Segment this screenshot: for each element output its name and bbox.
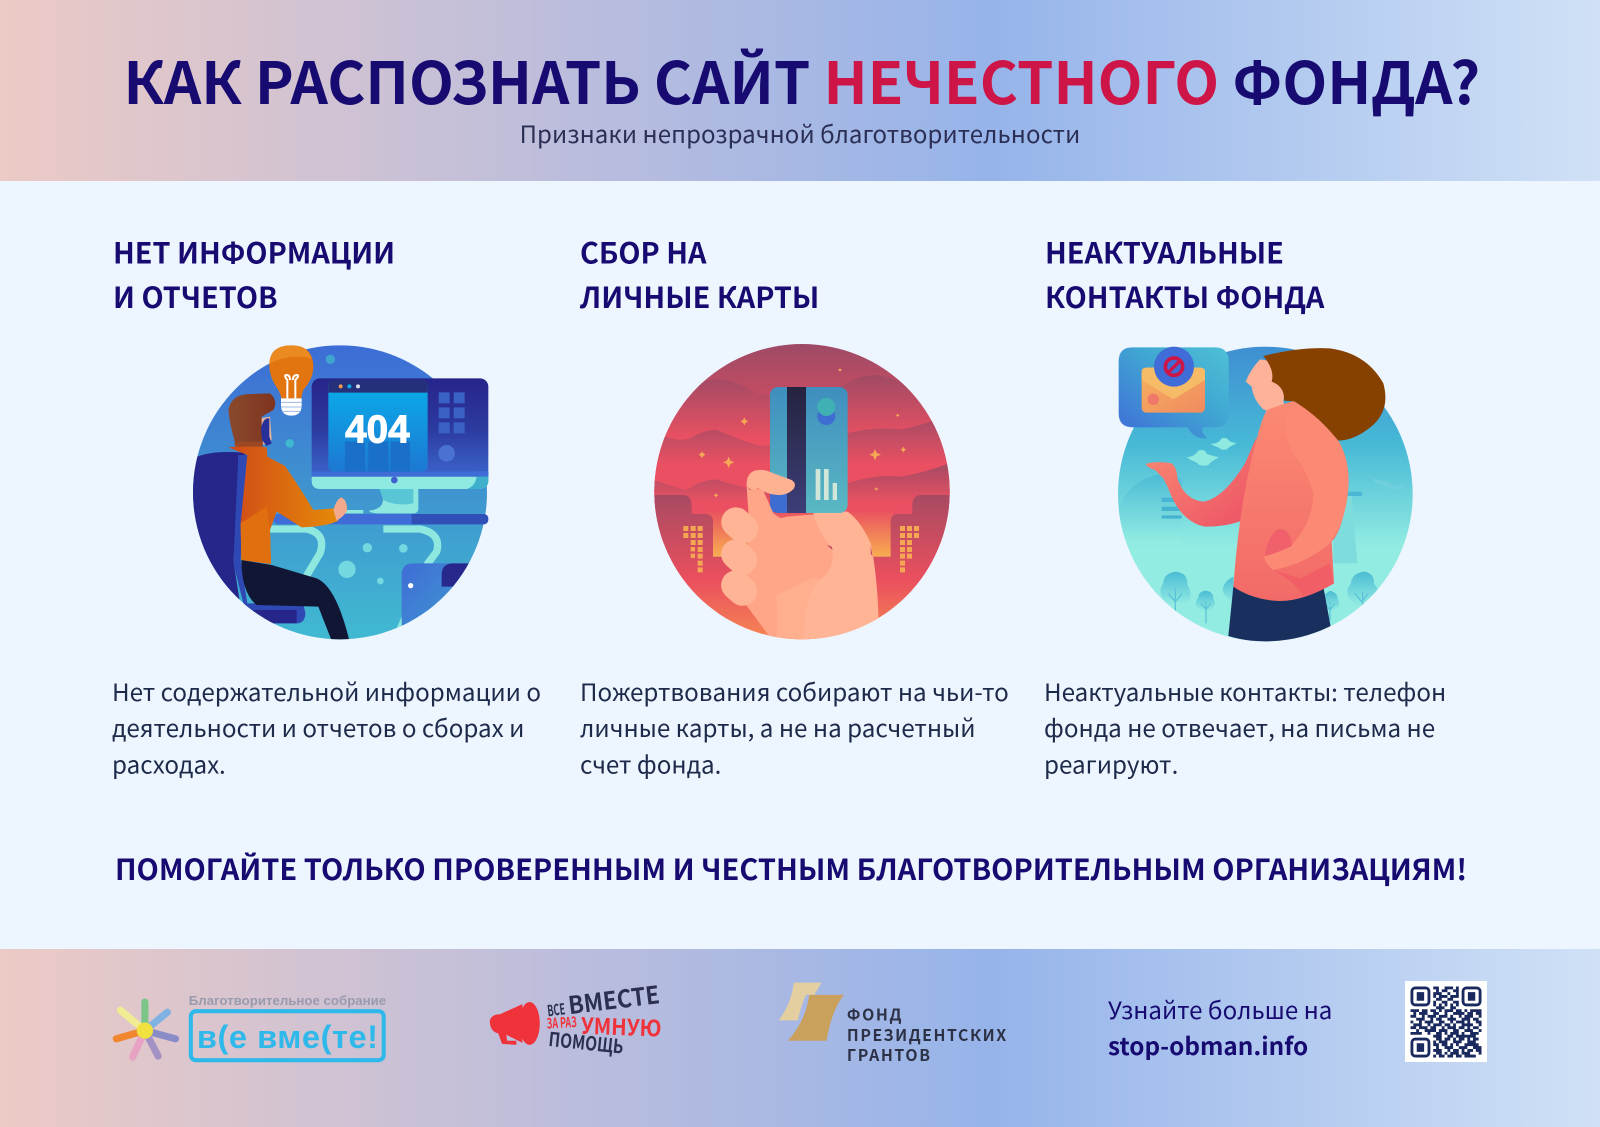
- logo: vse vmeste: [116, 993, 386, 1060]
- logo wordmark: ПОМОЩЬ: [547, 1025, 625, 1060]
- heading: outdated contacts: КОНТАКТЫ ФОНДА: [1045, 276, 1325, 317]
- body text: no information: Нет содержательной информации о: [112, 673, 541, 708]
- panel: personal cards: [579, 232, 1009, 780]
- logo: all together for sensible help: [490, 975, 662, 1060]
- QR code: [1405, 981, 1487, 1062]
- panel: outdated contacts: [1044, 232, 1446, 780]
- subtitle: Признаки непрозрачной благотворительности: [520, 115, 1080, 150]
- body text: outdated contacts: фонда не отвечает, на письма не: [1044, 709, 1435, 744]
- call to action: ПОМОГАЙТЕ ТОЛЬКО ПРОВЕРЕННЫМ И ЧЕСТНЫМ БЛАГОТВОРИТЕЛЬНЫМ ОРГАНИЗАЦИЯМ!: [115, 847, 1467, 889]
- logo wordmark: УМНУЮ: [580, 1009, 662, 1044]
- fund name: [847, 1002, 1008, 1066]
- fund name: ФОНД: [847, 1002, 903, 1025]
- heading: outdated contacts: НЕАКТУАЛЬНЫЕ: [1045, 232, 1284, 272]
- learn more text: [1108, 991, 1332, 1062]
- title: КАК РАСПОЗНАТЬ САЙТ НЕЧЕСТНОГО ФОНДА?: [124, 36, 1480, 121]
- illustration: woman with undelivered letter: [1117, 347, 1417, 643]
- body text: no information: расходах.: [112, 746, 226, 780]
- panel: no information: [112, 232, 541, 780]
- logo wordmark: [546, 975, 662, 1060]
- heading: personal cards: [579, 232, 819, 317]
- body text: personal cards: личные карты, а не на расчетный: [580, 709, 976, 744]
- logo caption: Благотворительное собрание: [189, 993, 386, 1008]
- heading: no information: [113, 232, 395, 317]
- illustration: man at a computer with 404: [190, 343, 490, 643]
- body text: personal cards: [580, 673, 1009, 780]
- heading: outdated contacts: [1045, 232, 1325, 317]
- logo box: в(е вме(те!: [197, 1018, 379, 1055]
- body text: no information: деятельности и отчетов о сборах и: [112, 709, 524, 744]
- logo wordmark: ВСЕ: [546, 996, 566, 1021]
- footer band: [0, 949, 1600, 1127]
- heading: no information: И ОТЧЕТОВ: [113, 276, 278, 317]
- heading: no information: НЕТ ИНФОРМАЦИИ: [113, 232, 395, 272]
- heading: personal cards: ЛИЧНЫЕ КАРТЫ: [579, 276, 819, 317]
- logo wordmark: ВМЕСТЕ: [566, 975, 661, 1021]
- learn more text: stop-obman.info: [1108, 1027, 1308, 1062]
- learn more text: Узнайте больше на: [1108, 991, 1332, 1026]
- body text: outdated contacts: Неактуальные контакты: телефон: [1044, 673, 1446, 708]
- body text: outdated contacts: [1044, 673, 1446, 780]
- illustration: hand holding a bank card: [653, 343, 953, 647]
- body text: outdated contacts: реагируют.: [1044, 746, 1178, 780]
- illustration: man at a computer with 404: 404: [345, 409, 410, 452]
- icon: gold parallelograms: [779, 983, 844, 1041]
- heading: personal cards: СБОР НА: [580, 232, 707, 272]
- logo wordmark: ЗА РАЗ: [546, 1011, 578, 1033]
- header band: [0, 0, 1600, 181]
- body text: no information: [112, 673, 541, 780]
- fund name: ГРАНТОВ: [847, 1043, 932, 1066]
- icon: megaphone: [490, 1002, 540, 1045]
- body text: personal cards: счет фонда.: [580, 746, 721, 780]
- logo: presidential grants fund: [779, 983, 1008, 1066]
- body text: personal cards: Пожертвования собирают на чьи-то: [580, 673, 1009, 708]
- icon: flower: [116, 1002, 176, 1057]
- fund name: ПРЕЗИДЕНТСКИХ: [847, 1023, 1008, 1046]
